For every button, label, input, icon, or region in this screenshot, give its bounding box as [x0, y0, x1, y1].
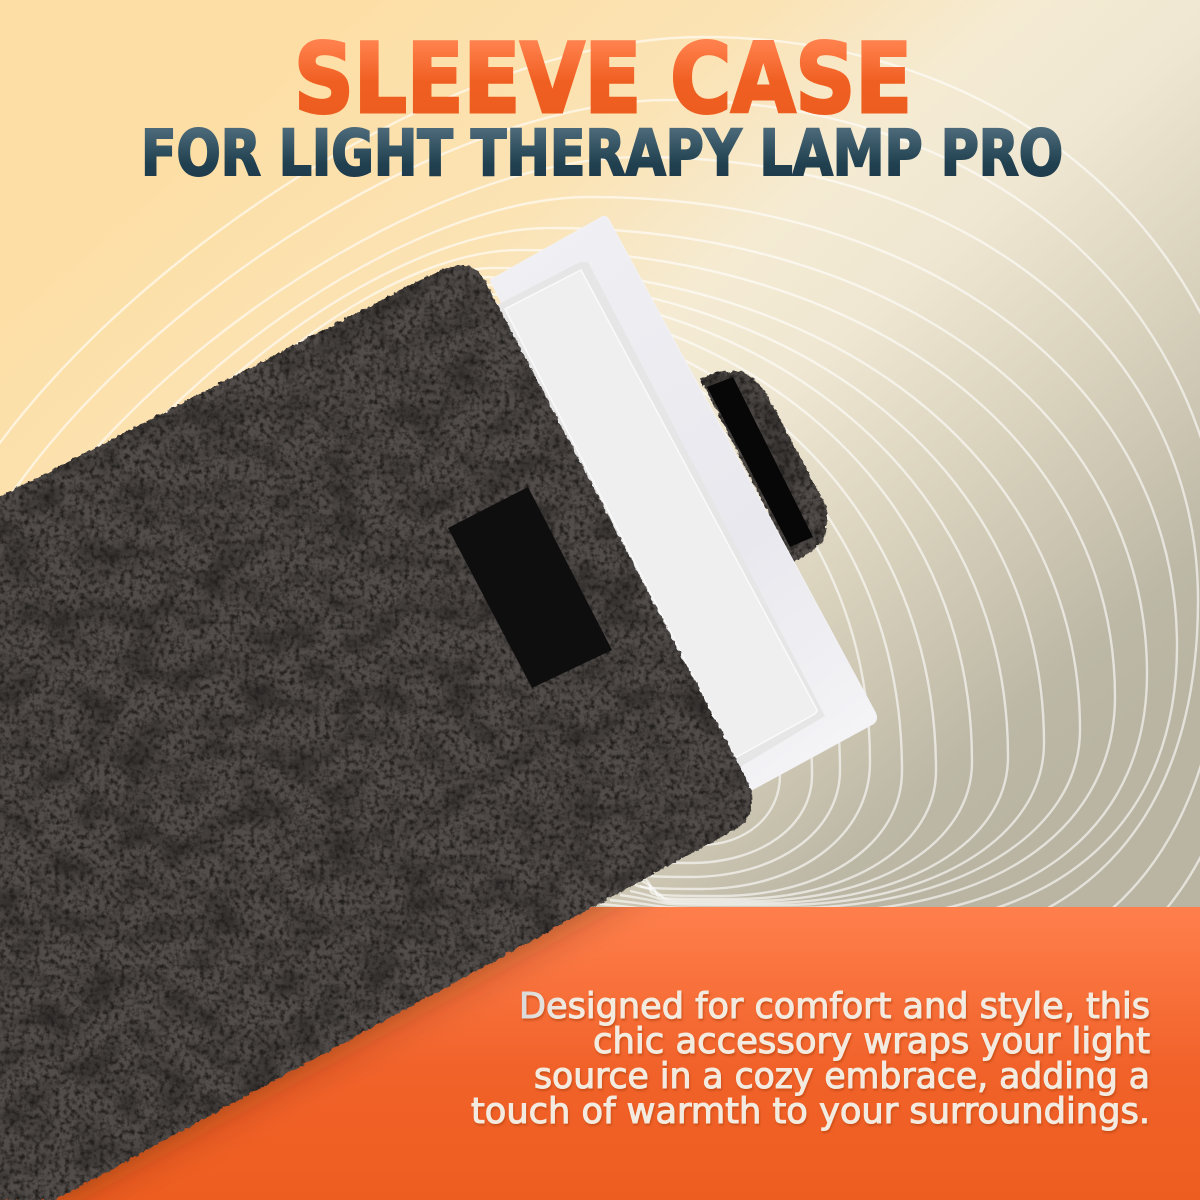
description text [471, 986, 1150, 1132]
back tab with strap [700, 371, 827, 562]
light therapy lamp [490, 216, 877, 791]
velcro patch [448, 487, 612, 688]
description text: chic accessory wraps your light [593, 1021, 1150, 1062]
lamp frame [490, 216, 877, 791]
sleeve shadow on panel [1, 907, 652, 1200]
orange bottom panel [0, 907, 1200, 1200]
description text: source in a cozy embrace, adding a [534, 1056, 1150, 1097]
description text: touch of warmth to your surroundings. [471, 1091, 1150, 1132]
description text: Designed for comfort and style, this [519, 986, 1150, 1027]
lamp screen [505, 270, 817, 758]
lamp bezel ridge [497, 262, 825, 770]
main title: SLEEVE CASE [294, 23, 912, 135]
felt sleeve [0, 265, 753, 1200]
subtitle: FOR LIGHT THERAPY LAMP PRO [141, 117, 1063, 190]
